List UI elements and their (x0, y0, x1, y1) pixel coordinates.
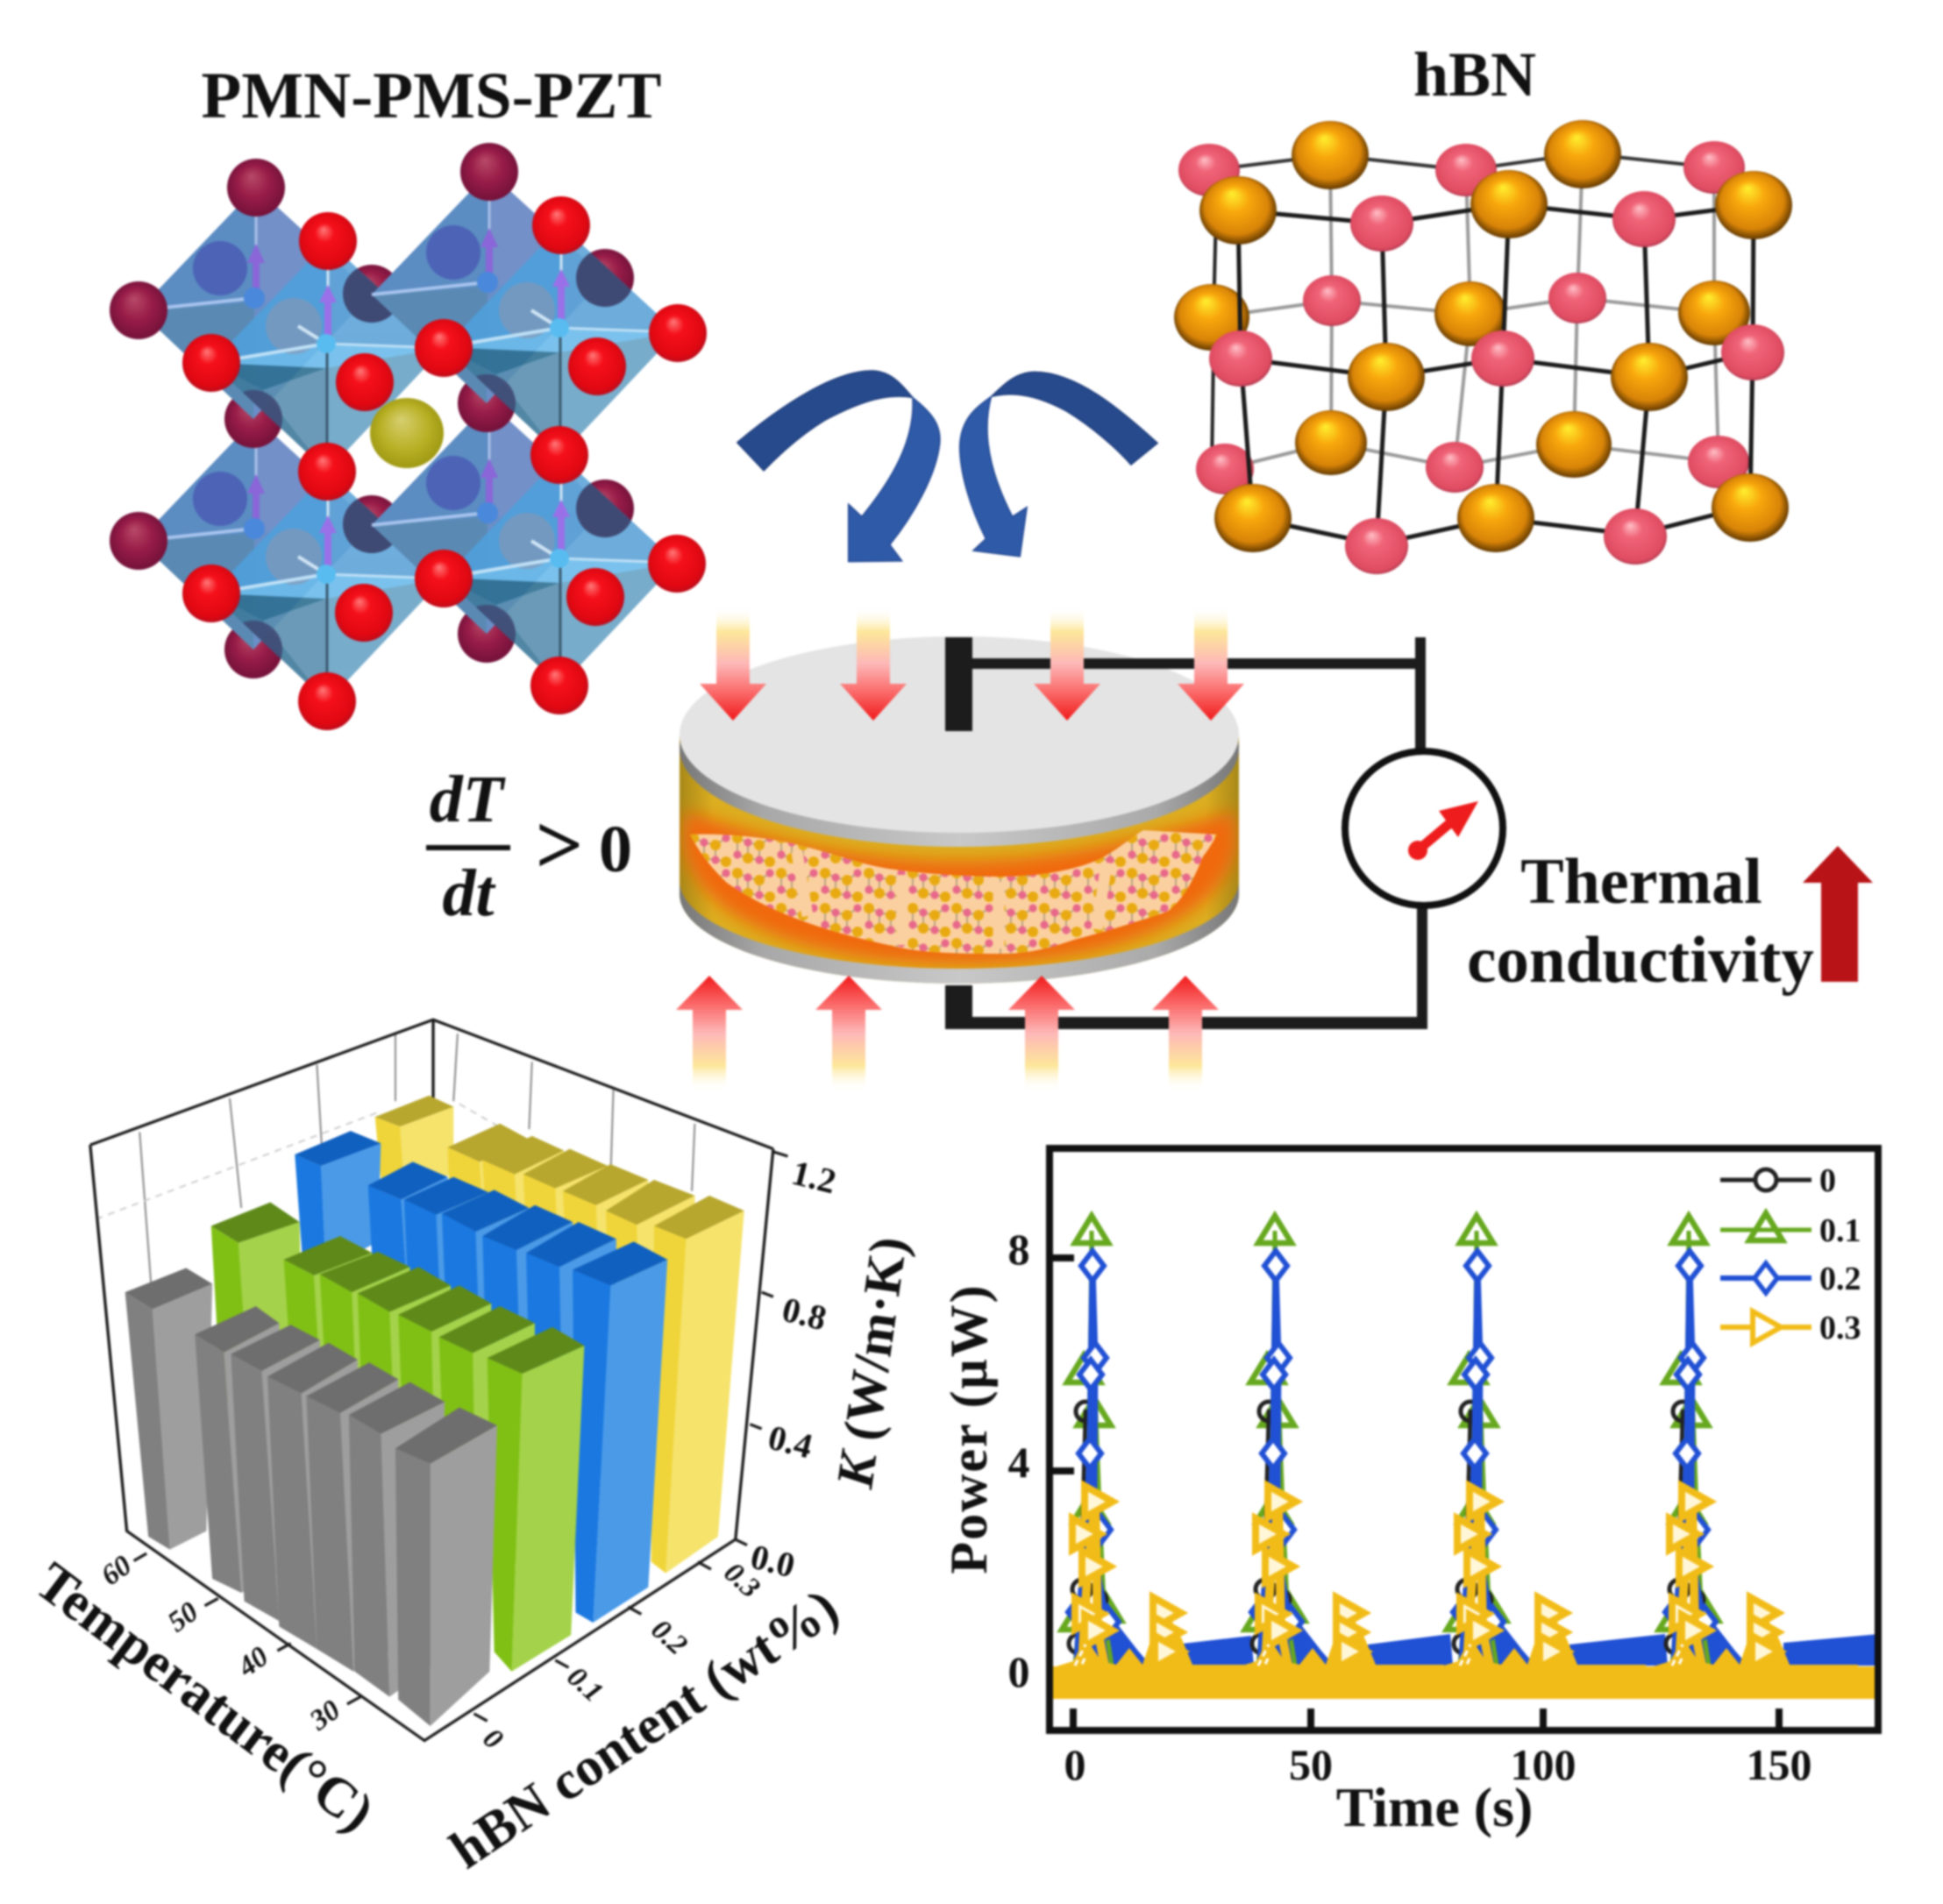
axes and ticks (90, 1145, 787, 1741)
legend: 0.1 (1819, 1212, 1861, 1249)
3D bar chart (25, 1019, 918, 1880)
meter (1345, 751, 1503, 906)
power vs time line chart (940, 1148, 1885, 1838)
yellow bars 0.3 wt% (375, 1096, 744, 1574)
z axis tick labels: 0.8 (779, 1289, 830, 1338)
peak cycle 2 (1234, 1216, 1444, 1699)
hBN tick labels: 0.2 (645, 1614, 693, 1661)
temperature axis title: Temperature(°C) (25, 1550, 386, 1844)
y axis title: Power (μW) (940, 1283, 998, 1574)
label: Thermal conductivity: Thermal (1520, 846, 1762, 918)
z axis tick labels (747, 1153, 840, 1585)
temperature tick labels (96, 1550, 346, 1737)
icon: red oxygen atoms (182, 196, 707, 730)
y tick labels (1008, 1225, 1029, 1696)
y tick labels: 4 (1008, 1438, 1029, 1487)
z axis title: K (W/m·K) (825, 1233, 918, 1493)
bottom electrode rim (680, 881, 1239, 984)
arrow: thermal conductivity up (1803, 846, 1873, 982)
top electrode surface (680, 636, 1239, 833)
back atoms (1174, 120, 1750, 494)
blue baseline bands (1175, 1634, 1885, 1666)
z axis tick labels: 0.4 (765, 1417, 816, 1466)
peak cycle 3 (1435, 1216, 1646, 1699)
disc body (680, 736, 1239, 984)
y tick labels: 0 (1008, 1647, 1029, 1696)
disc sample with heat layer (680, 636, 1239, 984)
heat arrows from above (700, 607, 1244, 721)
top electrode lead (945, 637, 972, 731)
legend: 0.2 (1819, 1261, 1861, 1297)
circuit with meter (945, 637, 1503, 1029)
z axis tick labels: 0.0 (747, 1537, 799, 1585)
equation dT/dt > 0: 0 (599, 813, 632, 886)
green bars 0.1 wt% (211, 1203, 584, 1672)
title: PMN-PMS-PZT: PMN-PMS-PZT (202, 60, 661, 132)
peak cycle 1 (1050, 1216, 1261, 1699)
icon: A-site yellow atom (370, 398, 444, 468)
x axis title: Time (s) (1336, 1776, 1533, 1838)
data series (1050, 1216, 1885, 1699)
equation dT/dt > 0: dT (430, 763, 506, 836)
walls and grid (90, 1019, 773, 1287)
x tick labels: 0 (1064, 1740, 1085, 1789)
hBN axis title: hBN content (wt%) (440, 1578, 849, 1880)
temperature tick labels: 50 (162, 1596, 204, 1638)
legend (1720, 1162, 1861, 1346)
y tick labels: 8 (1008, 1225, 1029, 1274)
temperature tick labels: 60 (96, 1550, 138, 1592)
label: Thermal conductivity (1467, 846, 1814, 997)
grey bars 0 wt% (125, 1268, 497, 1726)
x tick labels: 150 (1747, 1740, 1811, 1789)
bottom electrode lead (945, 985, 972, 1029)
lattice bonds back (1209, 153, 1719, 469)
heated glow (683, 811, 1237, 964)
peak cycle 4 (1648, 1216, 1858, 1699)
front atoms (1199, 170, 1792, 574)
blue bars 0.2 wt% (295, 1131, 667, 1623)
top electrode rim (680, 650, 1239, 847)
equation dT/dt > 0 (426, 763, 632, 930)
yellow baseline band (1050, 1666, 1878, 1699)
z axis tick labels: 1.2 (788, 1153, 840, 1201)
icon: dark oxygen atoms (110, 143, 518, 570)
frame and ticks (1050, 1148, 1878, 1730)
hBN tick labels: 0.1 (561, 1661, 609, 1709)
perovskite crystal structure (110, 143, 707, 730)
legend: 0 (1819, 1162, 1836, 1199)
label: Thermal conductivity: conductivity (1467, 924, 1814, 997)
legend: 0.3 (1819, 1310, 1861, 1346)
temperature tick labels: 40 (231, 1641, 274, 1684)
arrow: right curved blue (960, 372, 1157, 557)
hBN tick labels: 0 (477, 1723, 509, 1756)
x tick labels: 100 (1510, 1740, 1576, 1789)
title: hBN: hBN (1413, 39, 1536, 110)
hBN filled composite crescent (690, 830, 1217, 954)
temperature tick labels: 30 (303, 1694, 346, 1737)
arrow: left curved blue (737, 371, 940, 562)
x tick labels: 50 (1289, 1740, 1333, 1789)
hBN tick labels: 0.3 (718, 1557, 765, 1604)
hBN crystal lattice (1174, 120, 1792, 574)
equation dT/dt > 0: dt (442, 856, 496, 930)
hBN tick labels (477, 1557, 765, 1756)
lattice bonds front (1238, 204, 1754, 544)
x tick labels (1064, 1740, 1811, 1789)
heat arrows from below (676, 976, 1219, 1091)
equation dT/dt > 0: > (536, 798, 583, 892)
